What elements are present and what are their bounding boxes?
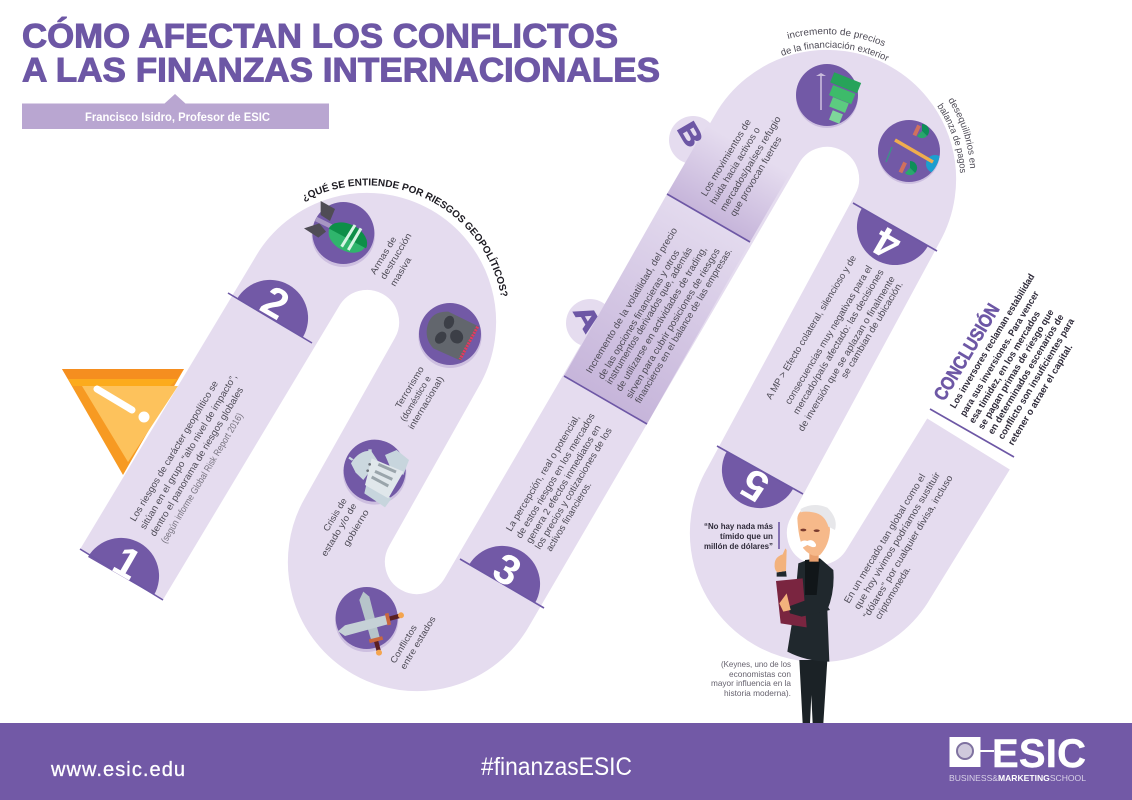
text block: step 3: La percepción, real o potencial,	[504, 413, 583, 534]
icon: balance of payments	[878, 120, 944, 184]
letter tabs A and B	[566, 116, 717, 347]
label: terrorismo: internacional)	[406, 374, 446, 431]
text block: section B	[699, 114, 785, 219]
marker 3	[460, 543, 544, 608]
marker 4	[853, 203, 937, 270]
section A shading	[564, 194, 750, 424]
logo: ESIC: BUSINESS&MARKETINGSCHOOL	[949, 773, 1086, 783]
author ribbon	[22, 94, 329, 129]
text block: step 1: sitúan en el grupo “alto nivel de impacto”,	[138, 372, 240, 532]
footer band	[0, 723, 1132, 800]
curved label: desequilibrios: desequilibrios en	[948, 98, 976, 168]
marker 1	[80, 536, 163, 600]
label: crisis: Crisis de	[321, 496, 349, 533]
label: crisis: gobierno	[341, 508, 371, 548]
logo: ESIC	[949, 732, 1086, 783]
section markers and numbers	[80, 194, 937, 608]
conclusion: se pagan primas de riesgo que	[976, 308, 1057, 432]
conclusion	[929, 272, 1078, 457]
marker 5	[717, 446, 803, 512]
footer: hashtag: #finanzasESIC	[481, 753, 632, 781]
label: armas: Armas de	[368, 235, 398, 276]
curved label: desequilibrios: balanza de pagos	[937, 102, 965, 173]
text block: section A: instrumentos derivados que, además	[604, 245, 695, 387]
label: armas: masiva	[388, 255, 413, 288]
label: terrorismo	[393, 365, 446, 431]
text block: section A	[584, 226, 735, 406]
marker 5: 5	[733, 459, 777, 512]
caption: Keynes: economistas con	[729, 669, 791, 679]
caption: Keynes: (Keynes, uno de los	[721, 659, 791, 669]
section B shading	[667, 125, 790, 242]
text block: section A: Incremento de la volatilidad, del precio	[584, 226, 680, 376]
marker 3: 3	[485, 543, 529, 596]
conclusion: para sus inversiones. Para vencer	[958, 289, 1042, 419]
text block: section A: de las opciones financieras y otros	[596, 248, 682, 382]
marker 2: 2	[253, 276, 297, 329]
label: conflictos	[388, 614, 438, 671]
label: terrorismo: Terrorismo	[393, 365, 426, 410]
text block: step 4: se cambian de ubicación.	[839, 280, 906, 381]
marker 2	[228, 276, 312, 343]
caption: Keynes: historia moderna).	[724, 688, 791, 698]
label: conflictos: entre estados	[398, 614, 438, 671]
winding path band	[122, 98, 968, 643]
text block: step 4	[764, 254, 906, 434]
label: armas	[368, 231, 413, 288]
figure: Keynes	[775, 505, 836, 724]
conclusion: Los inversores reclaman estabilidad	[948, 272, 1037, 411]
text block: section B: mercados/países refugio	[718, 114, 784, 214]
text block: step 4: de inversión que se aplazan o finalmente	[796, 274, 898, 434]
text block: step 3: de estos riesgos en los mercados	[514, 411, 598, 541]
text block: section A: financieros en el balance de las empresas.	[633, 246, 735, 406]
label: crisis	[319, 496, 371, 558]
curved heading: geopolitical risks: ¿QUÉ SE ENTIENDE POR RIESGOS GEOPOLÍTICOS?	[304, 178, 508, 296]
text block: step 5: En un mercado tan global como el	[842, 472, 928, 606]
caption: Keynes	[711, 659, 791, 698]
text block: step 4: mercado/país afectado: las decisiones	[791, 268, 887, 417]
conclusion: en determinados escenarios de	[986, 313, 1067, 437]
text block: section B: que provocan fuertes	[728, 135, 785, 219]
conclusion: conflicto son insuficientes para	[996, 316, 1078, 442]
text block: step 1: dentro el panorama de riesgos globales	[148, 385, 246, 539]
label: crisis: estado y/o de	[319, 501, 359, 558]
text block: section B: huida hacia activos o	[708, 125, 763, 207]
footer: website: www.esic.edu	[50, 759, 185, 781]
quote	[704, 521, 779, 551]
icon: warning triangle	[62, 369, 184, 475]
letter A: A	[567, 299, 607, 338]
curved label: incremento de precios: incremento de precios	[786, 28, 886, 46]
text block: section A: de utilizarse en actividades de trading,	[614, 245, 710, 394]
marker 1: 1	[105, 536, 149, 589]
divider A-B	[564, 194, 750, 424]
icon: bomb	[304, 201, 375, 267]
conclusion: CONCLUSIÓN	[929, 300, 1004, 405]
text block: step 3	[504, 411, 615, 554]
letter B: B	[671, 117, 709, 152]
label: terrorismo: (doméstico e	[398, 374, 433, 423]
text block: section A: sirven para cubrir posiciones de riesgos	[624, 246, 723, 401]
curved label: incremento de precios: de la financiación exterior	[781, 40, 889, 61]
title	[22, 18, 660, 90]
quote: millón de dólares”	[704, 541, 773, 551]
curved label: incremento de precios	[781, 28, 889, 61]
conclusion: esa timidez, en los mercados	[967, 309, 1043, 426]
label: armas: destrucción	[378, 231, 413, 281]
text block: section B: Los movimientos de	[699, 117, 754, 199]
text block: step 3: genera 2 efectos inmediatos en	[524, 423, 604, 546]
caption: Keynes: mayor influencia en la	[711, 678, 791, 688]
quote: “No hay nada más	[704, 521, 773, 531]
title: CÓMO AFECTAN LOS CONFLICTOS	[22, 18, 618, 56]
quote: tímido que un	[720, 531, 773, 541]
conclusion: retener o atraer el capital.	[1006, 342, 1075, 448]
text block: step 1: (según informe Global Risk Report 2016)	[159, 411, 246, 546]
text block: step 3: los precios y cotizaciones de los	[533, 426, 615, 552]
text block: step 5: “dólares” por cualquier divisa, incluso	[861, 473, 956, 621]
text block: step 1: Los riesgos de carácter geopolítico se	[128, 379, 221, 524]
text block: step 4: consecuencias muy negativas para el	[783, 264, 875, 407]
icon: rising bars	[796, 64, 861, 128]
icon: terrorism mask	[418, 303, 482, 368]
text block: step 5: criptomoneda.	[873, 564, 913, 622]
logo: ESIC: ESIC	[992, 732, 1086, 776]
text block: step 5: que hoy vivimos podríamos sustituir	[852, 470, 943, 612]
text block: step 3: activos financieros.	[544, 480, 594, 554]
marker 4: 4	[864, 217, 909, 270]
icon: capitol building	[343, 440, 409, 507]
icon: crossed swords	[335, 587, 404, 656]
author ribbon: Francisco Isidro, Profesor de ESIC	[85, 110, 270, 124]
label: conflictos: Conflictos	[388, 623, 419, 665]
text block: step 4: A MP > Efecto colateral, silencioso y de	[764, 254, 859, 402]
title: A LAS FINANZAS INTERNACIONALES	[22, 52, 660, 90]
